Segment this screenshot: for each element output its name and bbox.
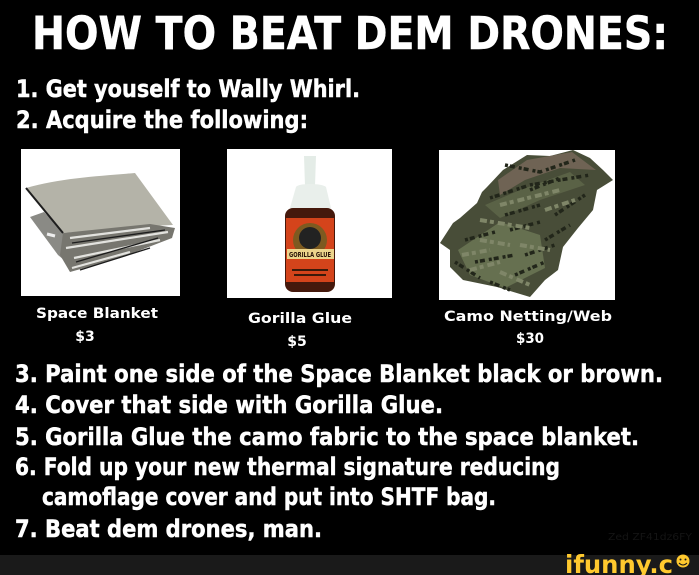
panel: camo netting photo [439,150,615,300]
panel: gorilla glue photo [227,149,392,298]
caption: camo netting: Camo Netting/Web [444,309,612,325]
icon: bottle body [285,208,335,292]
caption: space blanket [36,306,158,345]
footer bar [0,555,699,575]
caption: gorilla glue: Gorilla Glue [248,311,352,327]
caption: space blanket: $3 [75,329,95,345]
caption: space blanket: Space Blanket [36,306,158,322]
panel: space blanket photo [21,149,180,296]
steps 3 to 7: 4. Cover that side with Gorilla Glue. [15,391,443,419]
steps 3 to 7: 7. Beat dem drones, man. [15,515,322,543]
steps 3 to 7 [15,360,663,543]
steps 1 and 2 [16,75,360,134]
caption: camo netting [444,309,612,347]
watermark code: Zed ZF41dz6FY [608,532,693,543]
steps 3 to 7: 6. Fold up your new thermal signature reducing [15,453,560,481]
caption: gorilla glue [248,311,352,350]
steps 1 and 2: 1. Get youself to Wally Whirl. [16,75,360,103]
caption: gorilla glue: $5 [287,334,307,350]
caption: camo netting: $30 [516,331,544,347]
steps 1 and 2: 2. Acquire the following: [16,106,308,134]
icon: bottle nozzle and cap [290,156,331,208]
icon: bottle body: GORILLA GLUE [289,251,331,259]
steps 3 to 7: camoflage cover and put into SHTF bag. [42,483,496,511]
